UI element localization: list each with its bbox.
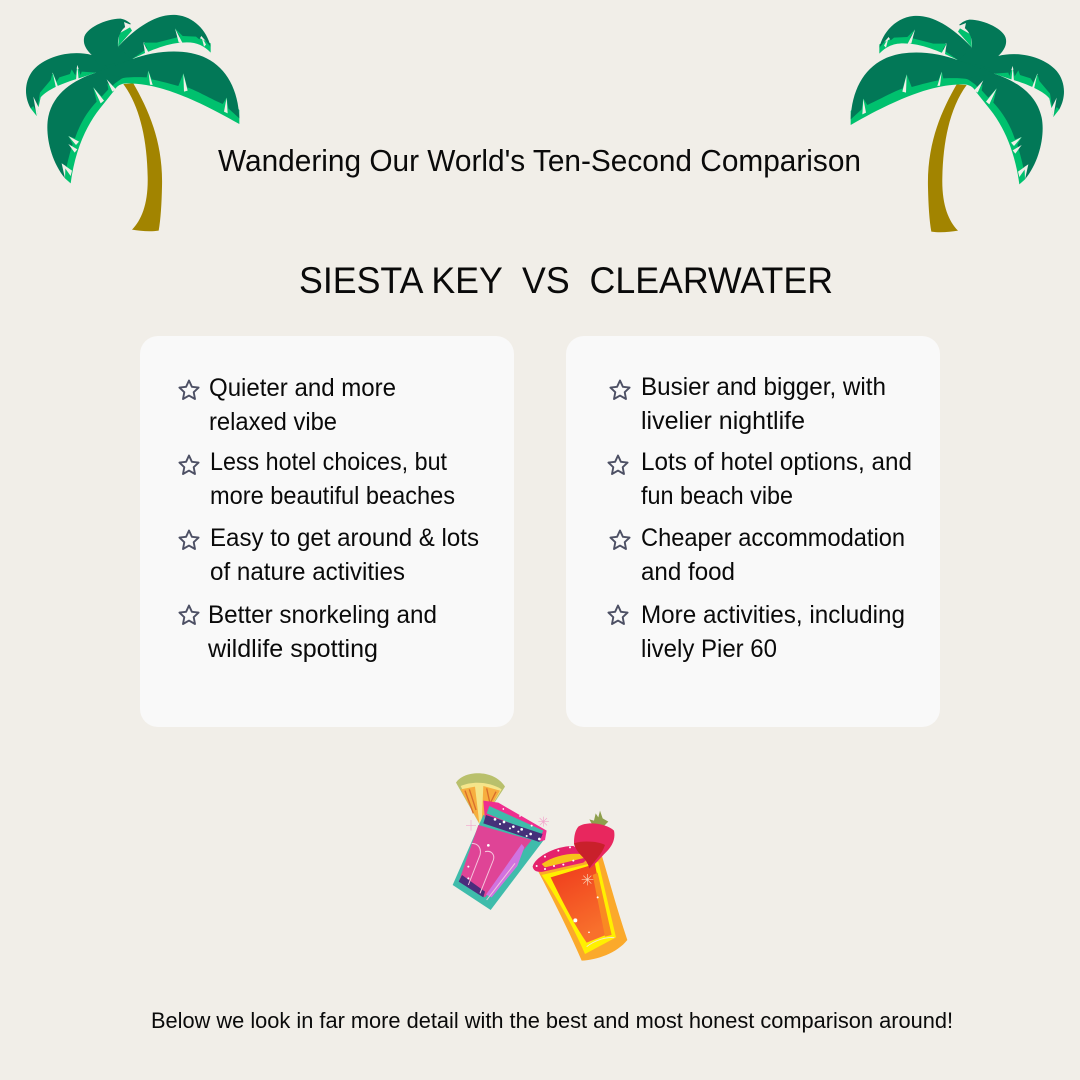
heading: Siesta Key vs Clearwater: SIESTA KEY VS CLEARWATER xyxy=(299,260,833,301)
list item: snorkeling: wildlife spotting xyxy=(207,635,378,663)
list item: quieter: relaxed vibe xyxy=(209,408,337,436)
list item: busier xyxy=(610,373,886,435)
list item: hotel options: Lots of hotel options, and xyxy=(641,448,912,476)
illustration: two cocktails xyxy=(453,773,627,961)
list item: busier: livelier nightlife xyxy=(641,407,805,435)
panel: Siesta Key xyxy=(140,336,514,727)
list item: getting around: of nature activities xyxy=(210,558,405,586)
list item: busier: Busier and bigger, with xyxy=(641,373,886,401)
list item: getting around xyxy=(179,524,479,586)
list item: cheaper xyxy=(610,524,905,586)
list item: activities: More activities, including xyxy=(641,601,905,629)
list item: cheaper: Cheaper accommodation xyxy=(641,524,905,552)
list item: activities xyxy=(608,601,905,663)
list item: hotel options xyxy=(608,448,912,510)
icon: palm tree left xyxy=(26,15,239,231)
list item: hotels: Less hotel choices, but xyxy=(210,448,447,476)
title: Wandering Our World's Ten-Second Comparison xyxy=(218,143,861,178)
list item: hotel options: fun beach vibe xyxy=(641,482,793,510)
list item: activities: lively Pier 60 xyxy=(641,635,777,663)
panel: Clearwater xyxy=(566,336,940,727)
list item: quieter: Quieter and more xyxy=(209,374,396,402)
list item: snorkeling: Better snorkeling and xyxy=(208,601,437,629)
list item: hotels xyxy=(179,448,455,510)
icon: orange cocktail xyxy=(533,811,627,961)
icon: palm tree right xyxy=(851,16,1064,232)
list item: hotels: more beautiful beaches xyxy=(210,482,455,510)
list item: getting around: Easy to get around & lots xyxy=(210,524,479,552)
list item: snorkeling xyxy=(179,601,437,663)
list item: quieter xyxy=(179,374,396,436)
footer text: Below we look in far more detail with the best and most honest comparison around! xyxy=(151,1008,953,1033)
icon: pink cocktail xyxy=(453,773,549,910)
list item: cheaper: and food xyxy=(641,558,735,586)
